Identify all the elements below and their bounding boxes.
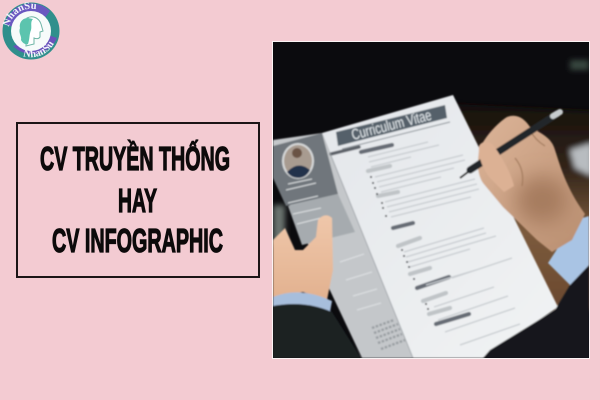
logo: NhanSu badge: [2, 2, 60, 60]
section pills dark: [361, 145, 469, 324]
sidebar skills grid: [372, 320, 405, 349]
section pills light: [368, 166, 450, 314]
blurred table background: [273, 60, 600, 310]
right suit sleeve: [483, 265, 589, 358]
sidebar portrait: [282, 143, 314, 179]
title text: HAY: [118, 182, 157, 219]
side label pills: [331, 147, 359, 154]
logo text: NhanSu: [23, 42, 54, 58]
icon: face profile: [19, 17, 43, 46]
left sleeve: [273, 304, 361, 358]
title box: [17, 123, 259, 277]
sheet: sidebar: [273, 133, 413, 358]
right cuff: [548, 216, 589, 285]
curriculum vitae title bar: [336, 105, 447, 146]
left cuff: [273, 292, 332, 312]
photo frame: [272, 41, 590, 359]
index finger over pen: [479, 142, 514, 192]
title text: CV TRUYỀN THỐNG: [40, 139, 230, 177]
pen: [460, 112, 560, 178]
sheet: paper: [322, 95, 558, 358]
body text lines: [368, 142, 520, 345]
right hand: [478, 116, 585, 252]
bullets: [371, 177, 428, 309]
left hand: [273, 215, 333, 300]
photo: hands holding curriculum vitae: [273, 42, 600, 358]
logo text: NhanSu: [2, 2, 36, 27]
title text: CV INFOGRAPHIC: [52, 222, 223, 259]
title text: [40, 139, 230, 259]
curriculum vitae title bar: Curriculum Vitae: [350, 107, 433, 144]
sidebar lines: [286, 179, 381, 310]
logo text: [2, 2, 54, 58]
